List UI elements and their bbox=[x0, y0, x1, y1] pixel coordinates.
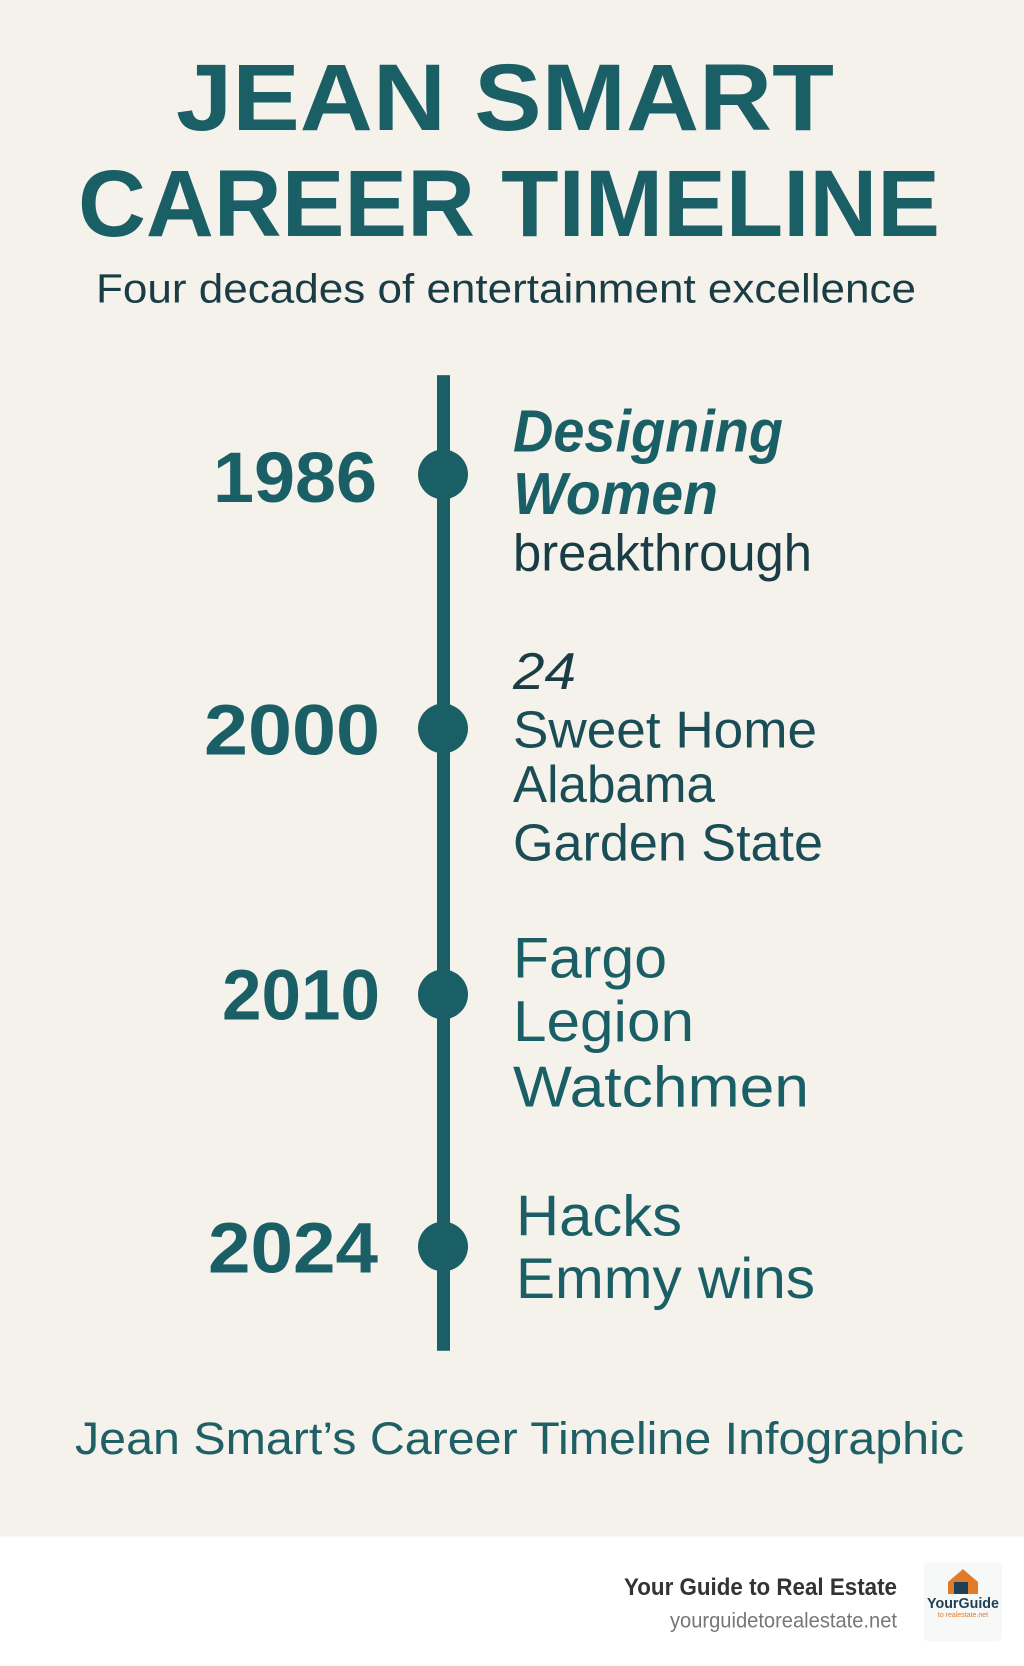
icon: logo: YourGuide bbox=[927, 1595, 999, 1612]
icon: logo: to realestate.net bbox=[938, 1612, 988, 1619]
footer brand: yourguidetorealestate.net bbox=[670, 1610, 897, 1633]
entry: 2010: Watchmen bbox=[513, 1056, 809, 1120]
entry: 2010: Fargo bbox=[513, 927, 667, 991]
entry: 2000 bbox=[204, 642, 823, 871]
title bbox=[78, 45, 940, 257]
entry: 1986: 1986 bbox=[213, 438, 377, 518]
footer brand bbox=[624, 1574, 897, 1633]
caption: Jean Smart’s Career Timeline Infographic bbox=[75, 1413, 964, 1464]
entry: 2010 bbox=[222, 927, 809, 1120]
entry: 1986: Designing bbox=[513, 398, 783, 465]
entry: 2000: Alabama bbox=[513, 755, 715, 813]
entry: 1986 bbox=[213, 398, 812, 582]
entry: 1986: Women bbox=[513, 460, 718, 527]
entry: 2010: Legion bbox=[513, 990, 694, 1054]
entry: 2024: 2024 bbox=[208, 1209, 378, 1288]
footer brand: Your Guide to Real Estate bbox=[624, 1574, 897, 1601]
title: CAREER TIMELINE bbox=[78, 152, 940, 257]
icon: logo bbox=[924, 1562, 1002, 1642]
title: JEAN SMART bbox=[176, 45, 834, 151]
entry: 2000: 24 bbox=[512, 642, 576, 700]
entry: 2024: Emmy wins bbox=[516, 1247, 815, 1311]
entry: 1986: breakthrough bbox=[513, 524, 812, 582]
entry: 2024: Hacks bbox=[516, 1185, 682, 1249]
timeline axis bbox=[437, 375, 450, 1351]
subtitle: Four decades of entertainment excellence bbox=[96, 266, 916, 312]
entry: 2010: 2010 bbox=[222, 956, 380, 1035]
entry: 2024 bbox=[208, 1185, 815, 1311]
entry: 2000: Garden State bbox=[513, 814, 823, 871]
entry: 2000: 2000 bbox=[204, 691, 380, 770]
entry: 2000: Sweet Home bbox=[513, 701, 817, 758]
